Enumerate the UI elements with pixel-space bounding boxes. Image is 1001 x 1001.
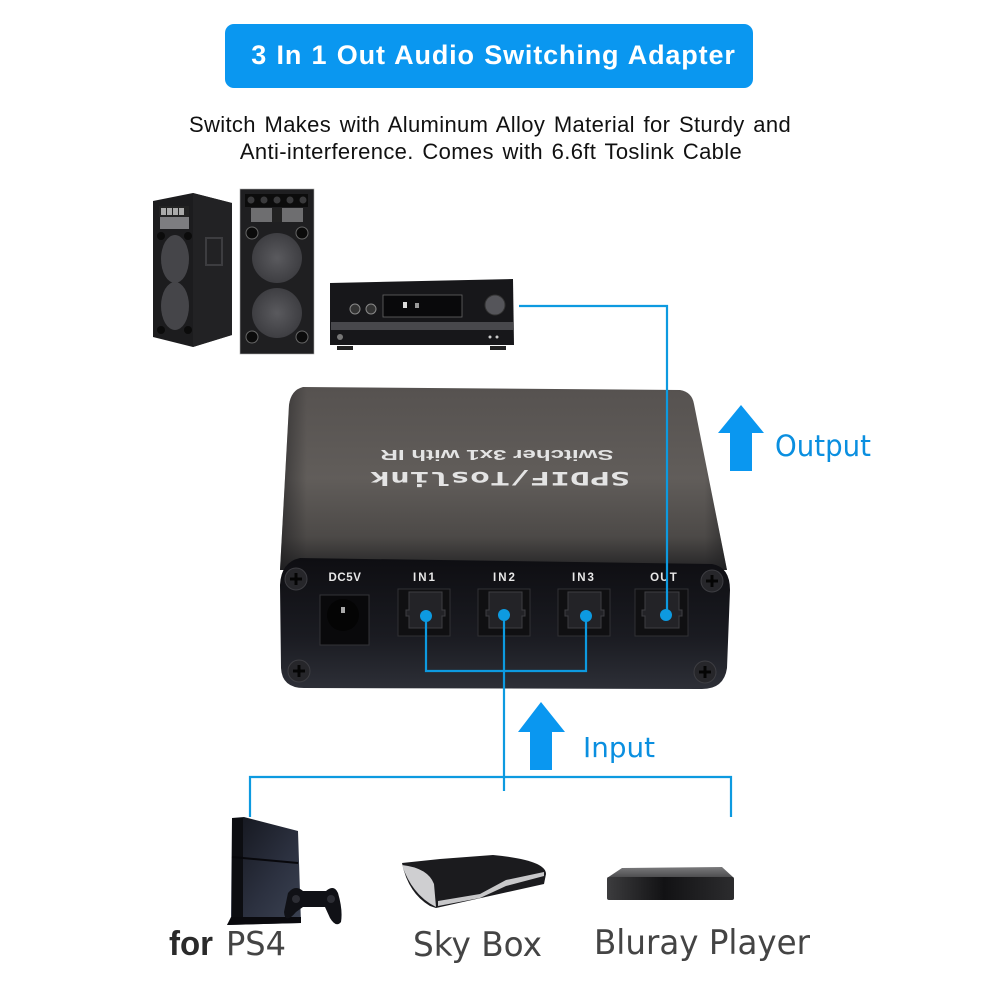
icon: Bluray player bbox=[607, 867, 734, 900]
port labels bbox=[328, 572, 678, 584]
output label: Output bbox=[775, 429, 871, 463]
optical ports bbox=[398, 589, 688, 636]
screws bbox=[285, 568, 723, 683]
title banner: 3 In 1 Out Audio Switching Adapter bbox=[251, 40, 736, 70]
icon: side speaker bbox=[153, 193, 232, 347]
icon: PS4 console bbox=[227, 817, 342, 925]
device: switcher box bbox=[280, 387, 730, 689]
icon: Sky Box bbox=[402, 855, 546, 908]
arrow: input bbox=[518, 702, 565, 770]
label: Sky Box: Sky Box bbox=[413, 925, 542, 965]
device labels bbox=[169, 923, 810, 965]
input label: Input bbox=[583, 731, 655, 764]
icon: front speaker bbox=[240, 189, 314, 354]
top face edge shading bbox=[280, 387, 727, 570]
controller bbox=[284, 888, 342, 924]
description text: Anti-interference. Comes with 6.6ft Toslink Cable bbox=[240, 139, 742, 164]
label: for PS4: for bbox=[169, 925, 213, 963]
port shutters bbox=[406, 592, 682, 628]
product label: Switcher 3x1 with IR bbox=[380, 446, 614, 463]
description text bbox=[189, 112, 791, 164]
front panel bbox=[280, 558, 730, 689]
output connection line bbox=[519, 306, 672, 621]
input connection lines bbox=[250, 609, 731, 817]
port labels: IN1 bbox=[413, 572, 437, 584]
label: Bluray Player: Bluray Player bbox=[594, 923, 810, 963]
title banner bbox=[225, 24, 753, 88]
description text: Switch Makes with Aluminum Alloy Material for Sturdy and bbox=[189, 112, 791, 137]
icon: AV receiver bbox=[330, 279, 514, 350]
port labels: DC5V bbox=[328, 572, 362, 584]
label: for PS4: PS4 bbox=[226, 924, 286, 963]
label: for PS4 bbox=[169, 924, 286, 963]
arrow: output bbox=[718, 405, 764, 471]
port labels: IN2 bbox=[493, 572, 517, 584]
product label bbox=[369, 446, 630, 489]
box top face bbox=[280, 387, 727, 570]
port labels: OUT bbox=[650, 572, 678, 584]
DC jack bbox=[320, 595, 369, 645]
port labels: IN3 bbox=[572, 572, 596, 584]
product label: SPDIF/Toslink bbox=[369, 467, 630, 489]
